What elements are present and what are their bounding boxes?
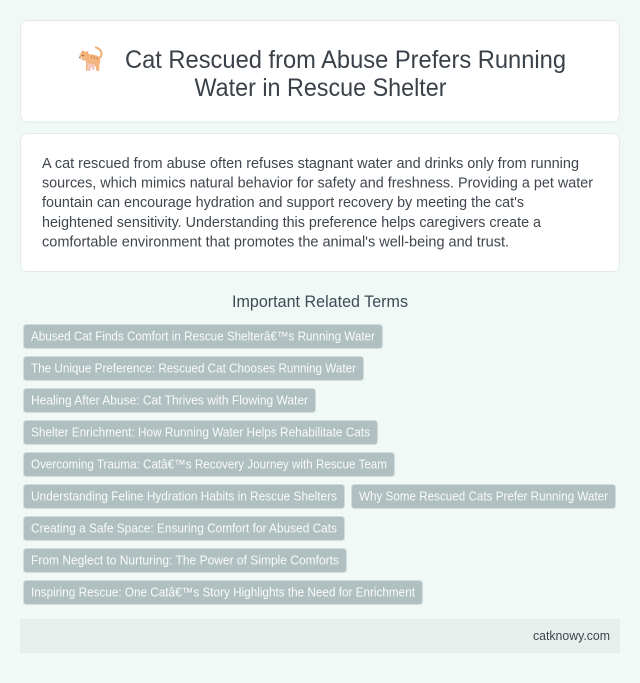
- footer: catknowy.com: [533, 629, 610, 643]
- tag 3: Healing After Abuse: Cat Thrives with Flowing Water: [31, 394, 308, 408]
- tag 6: [24, 484, 344, 508]
- tag 2: The Unique Preference: Rescued Cat Chooses Running Water: [31, 362, 356, 376]
- tag list: [24, 324, 616, 604]
- title text: [125, 46, 566, 102]
- tag 1: [24, 324, 382, 348]
- tag 9: From Neglect to Nurturing: The Power of Simple Comforts: [31, 554, 339, 568]
- summary text: A cat rescued from abuse often refuses stagnant water and drinks only from running: [42, 155, 579, 172]
- tag 8: [24, 516, 344, 540]
- tag 5: Overcoming Trauma: Catâ€™s Recovery Journey with Rescue Team: [31, 458, 387, 472]
- tag 1: Abused Cat Finds Comfort in Rescue Shelterâ€™s Running Water: [31, 330, 375, 344]
- summary text: [42, 155, 593, 250]
- title text: Cat Rescued from Abuse Prefers Running: [125, 46, 566, 74]
- tag 5: [24, 452, 394, 476]
- tag 9: [24, 548, 346, 572]
- tag 8: Creating a Safe Space: Ensuring Comfort for Abused Cats: [31, 522, 337, 536]
- summary text: heightened sensitivity. Understanding this preference helps caregivers create a: [42, 214, 542, 231]
- title panel: [20, 20, 620, 122]
- tag 7: [352, 484, 616, 508]
- tag 4: [24, 420, 378, 444]
- tag 2: [24, 356, 364, 380]
- tag 6: Understanding Feline Hydration Habits in Rescue Shelters: [31, 490, 337, 504]
- tag 10: [24, 580, 422, 604]
- panel: summary: [20, 134, 620, 272]
- tag 10: Inspiring Rescue: One Catâ€™s Story Highlights the Need for Enrichment: [31, 586, 415, 600]
- tag 4: Shelter Enrichment: How Running Water Helps Rehabilitate Cats: [31, 426, 370, 440]
- tag 7: Why Some Rescued Cats Prefer Running Water: [359, 490, 608, 504]
- icon: cat: [79, 48, 102, 71]
- heading: important related terms: Important Related Terms: [232, 293, 408, 311]
- tag 3: [24, 388, 316, 412]
- summary text: comfortable environment that promotes the animal's well-being and trust.: [42, 233, 509, 250]
- summary text: fountain can encourage hydration and support recovery by meeting the cat's: [42, 194, 524, 211]
- title text: Water in Rescue Shelter: [194, 74, 446, 102]
- summary text: sources, which mimics natural behavior for safety and freshness. Providing a pet water: [42, 175, 593, 192]
- footer: [20, 619, 620, 653]
